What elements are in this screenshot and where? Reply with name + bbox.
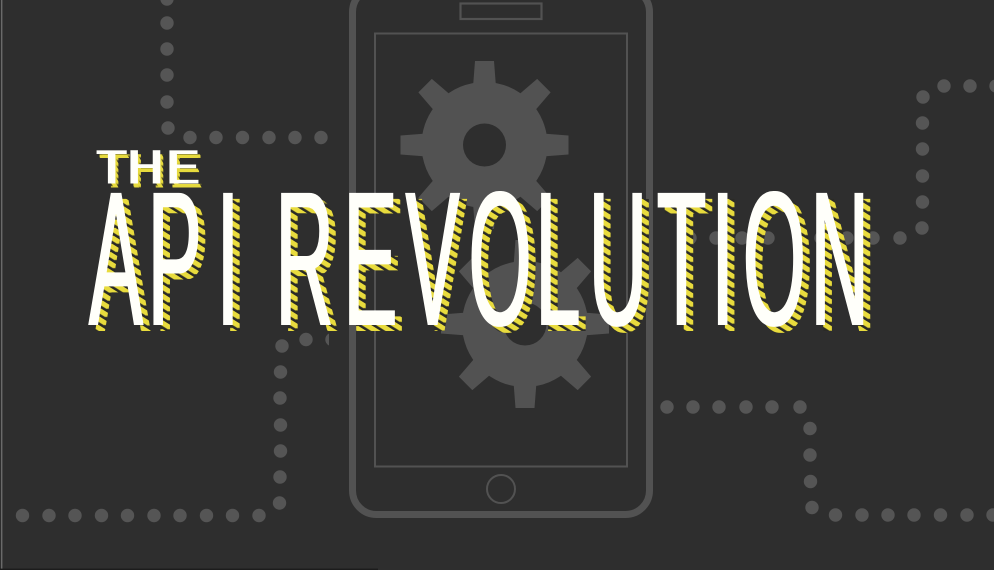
icon: upper gear xyxy=(400,61,568,229)
dotted path: top left xyxy=(160,0,328,144)
icon: smartphone outline xyxy=(352,0,650,514)
dotted path: bottom left xyxy=(16,333,339,522)
dotted path: top right xyxy=(683,79,994,245)
title: THE: THE xyxy=(100,146,202,198)
title: API REVOLUTION: API REVOLUTION xyxy=(89,153,869,367)
dotted path: bottom right xyxy=(660,400,994,522)
title: API REVOLUTION: API REVOLUTION xyxy=(96,159,876,373)
icon: lower gear xyxy=(441,240,609,408)
title: THE: THE xyxy=(97,142,199,194)
